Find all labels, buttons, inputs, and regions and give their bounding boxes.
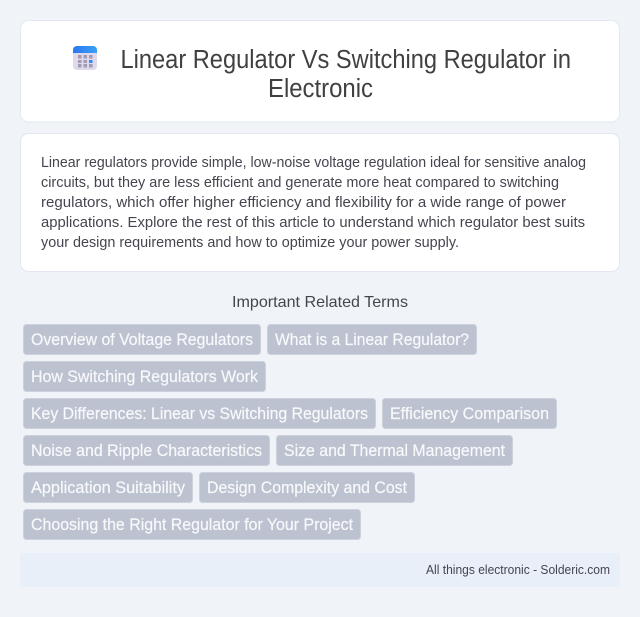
tag: application — [24, 472, 192, 502]
panel: title card — [20, 20, 620, 122]
tag list — [24, 324, 556, 540]
text block: introduction paragraph: Linear regulators provide simple, low-noise voltage regulation ideal for sensitive analog — [41, 155, 586, 171]
tag: noise: Noise and Ripple Characteristics — [31, 442, 262, 460]
tag: key differences: Key Differences: Linear vs Switching Regulators — [31, 405, 368, 423]
text block: introduction paragraph: circuits, but they are less efficient and generate more heat compared to switching — [41, 175, 559, 191]
tag: linear regulator: What is a Linear Regulator? — [275, 331, 469, 349]
tag: choosing — [24, 510, 360, 540]
tag: overview: Overview of Voltage Regulators — [31, 331, 253, 349]
footer: All things electronic - Solderic.com — [426, 563, 610, 577]
tag: choosing: Choosing the Right Regulator for Your Project — [31, 516, 353, 534]
tag: switching regulators: How Switching Regulators Work — [31, 368, 259, 386]
tag: design — [200, 472, 414, 502]
tag: overview — [24, 324, 260, 354]
footer — [20, 553, 620, 587]
title — [120, 46, 571, 103]
tag: efficiency: Efficiency Comparison — [390, 405, 549, 423]
heading: related terms: Important Related Terms — [232, 294, 408, 311]
tag: size — [276, 436, 512, 466]
tag: size: Size and Thermal Management — [284, 442, 505, 460]
text block: introduction paragraph — [41, 155, 586, 251]
tag: noise — [24, 436, 270, 466]
tag: key differences — [24, 398, 376, 428]
tag: efficiency — [382, 398, 556, 428]
panel: introduction — [20, 134, 620, 272]
title: Linear Regulator Vs Switching Regulator in — [120, 46, 571, 74]
tag: linear regulator — [268, 324, 476, 354]
text block: introduction paragraph: your design requirements and how to optimize your power supply. — [41, 235, 459, 251]
tag: switching regulators — [24, 362, 266, 392]
text block: introduction paragraph: regulators, which offer higher efficiency and flexibility for a wide range of power — [41, 195, 566, 211]
title: Electronic — [268, 75, 373, 103]
tag: design: Design Complexity and Cost — [207, 479, 407, 497]
tag: application: Application Suitability — [31, 479, 186, 497]
icon: calendar — [73, 46, 97, 70]
text block: introduction paragraph: applications. Explore the rest of this article to understand which regulator best suits — [41, 215, 585, 231]
